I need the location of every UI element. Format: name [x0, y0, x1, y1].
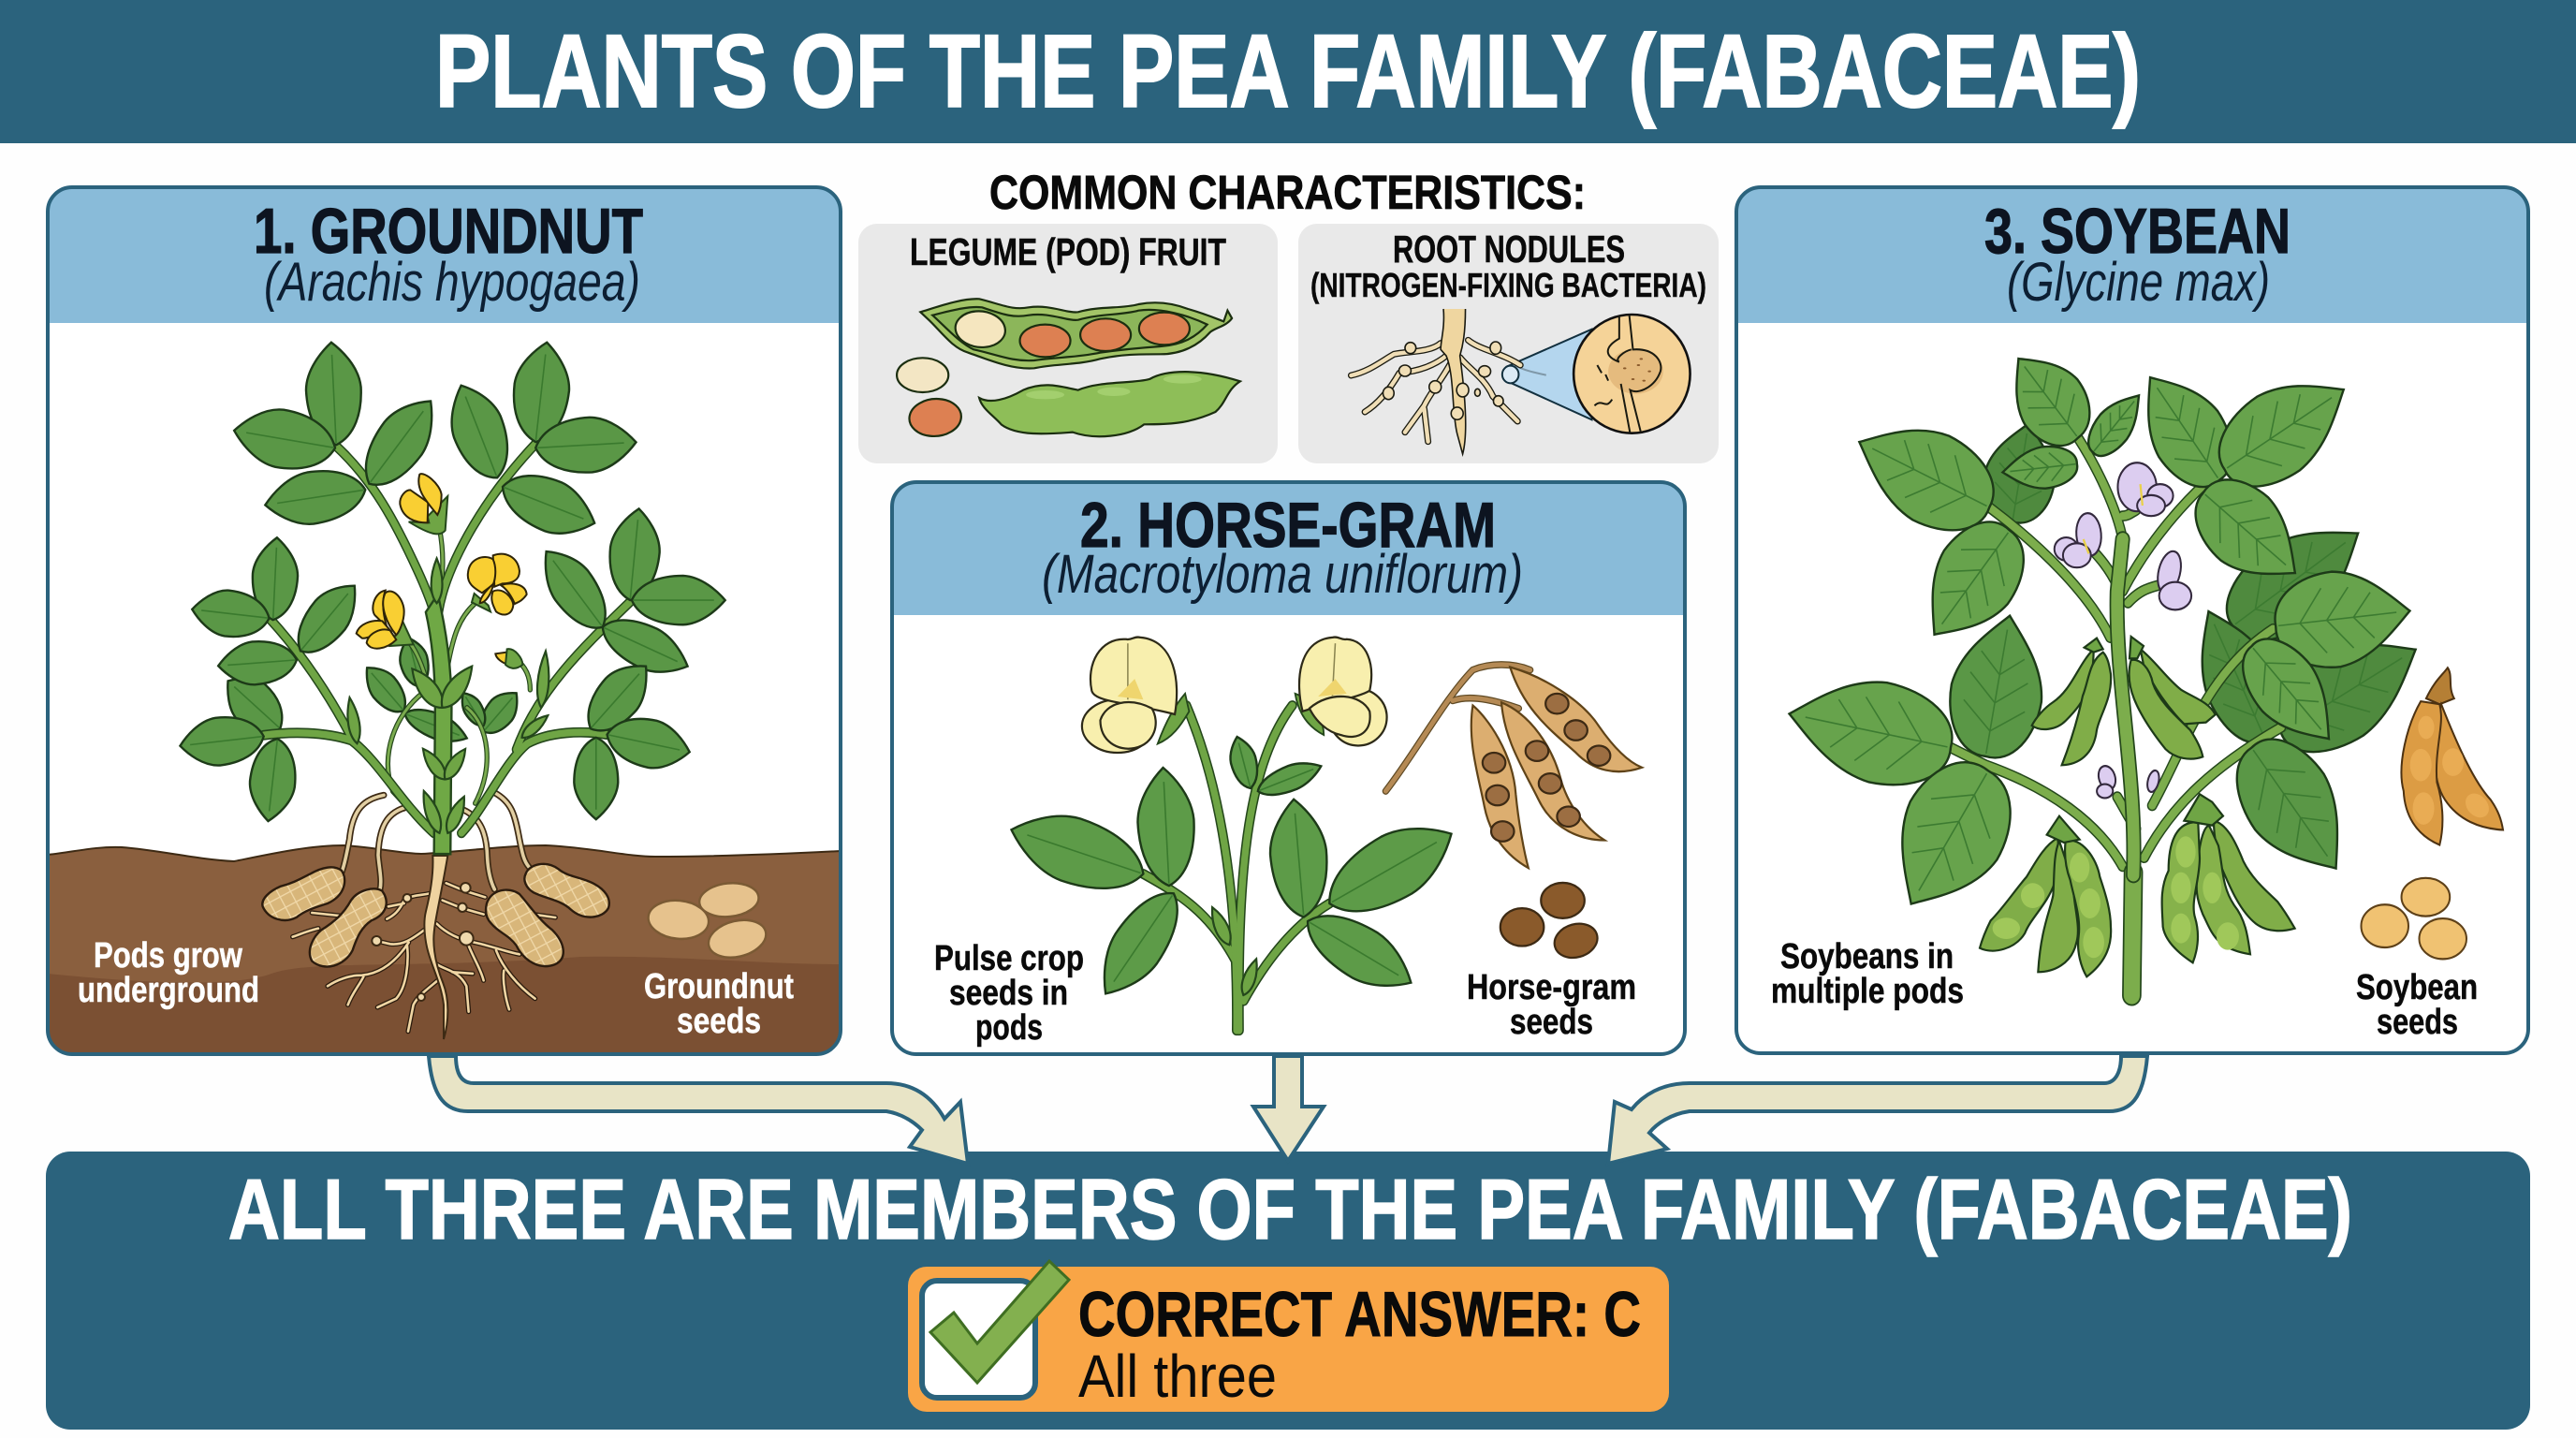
soybean flowers, ripe pods and seeds — [2055, 462, 2503, 959]
label: pods grow underground — [78, 936, 259, 1010]
title banner — [0, 0, 2576, 143]
arrow: soybean to conclusion — [1608, 1056, 2147, 1164]
label: horse-gram seeds: Horse-gram — [1467, 968, 1636, 1007]
soil — [48, 845, 841, 1054]
heading: legume pod fruit: LEGUME (POD) FRUIT — [910, 230, 1226, 273]
answer text: correct answer C: CORRECT ANSWER: C — [1078, 1279, 1641, 1350]
heading: common characteristics: COMMON CHARACTERISTICS: — [989, 166, 1586, 219]
label: soybean seeds: Soybean — [2356, 968, 2478, 1007]
soybean green pods — [1980, 637, 2295, 976]
heading: groundnut: 1. GROUNDNUT — [254, 196, 643, 267]
label: soybean seeds: seeds — [2377, 1003, 2458, 1042]
panel: root nodules — [1298, 224, 1719, 463]
label: horse-gram seeds — [1467, 968, 1636, 1042]
heading: soybean: 3. SOYBEAN — [1984, 196, 2291, 267]
soybean stems and leaves — [1780, 336, 2437, 995]
subheading: nitrogen-fixing bacteria: (NITROGEN-FIXING BACTERIA) — [1310, 266, 1706, 304]
heading: horse-gram: 2. HORSE-GRAM — [1080, 490, 1496, 561]
illustration: groundnut plant — [178, 339, 769, 1039]
panel header band: soybean — [1736, 187, 2528, 323]
panel: soybean — [1736, 187, 2528, 1053]
label: soybeans in multiple pods: Soybeans in — [1780, 937, 1954, 976]
arrow: horse-gram to conclusion — [1253, 1056, 1324, 1161]
title banner: PLANTS OF THE PEA FAMILY (FABACEAE) — [435, 14, 2141, 129]
panel: horse-gram — [892, 482, 1685, 1054]
label: soybeans in multiple pods: multiple pods — [1771, 972, 1964, 1011]
heading: root nodules: ROOT NODULES — [1393, 227, 1625, 271]
panel header band: horse-gram — [892, 482, 1685, 615]
label: soybeans in multiple pods — [1771, 937, 1964, 1011]
illustration: soybean plant — [1780, 336, 2503, 995]
label: pods grow underground: Pods grow — [94, 936, 242, 976]
groundnut stems and leaves — [178, 339, 769, 962]
label: pulse crop seeds in pods: pods — [975, 1008, 1043, 1048]
panel: groundnut — [48, 187, 841, 1054]
label: pulse crop seeds in pods: seeds in — [949, 974, 1068, 1013]
illustration: horse-gram plant — [1002, 637, 1642, 1031]
scientific name: Arachis hypogaea: (Arachis hypogaea) — [264, 252, 640, 313]
label: soybean seeds — [2356, 968, 2478, 1042]
label: pods grow underground: underground — [78, 971, 259, 1010]
answer text: all three: All three — [1078, 1343, 1277, 1410]
icon: root with magnified nodule — [1351, 309, 1690, 454]
label: groundnut seeds: Groundnut — [644, 967, 794, 1006]
panel: legume pod fruit — [858, 224, 1278, 463]
label: horse-gram seeds: seeds — [1510, 1003, 1593, 1042]
scientific name: Glycine max: (Glycine max) — [2007, 252, 2270, 313]
icon: legume pods and seeds — [897, 299, 1240, 438]
conclusion banner — [46, 1152, 2530, 1430]
scientific name: Macrotyloma uniflorum: (Macrotyloma uniflorum) — [1042, 544, 1523, 605]
arrow: groundnut to conclusion — [429, 1056, 968, 1164]
label: groundnut seeds: seeds — [677, 1002, 761, 1041]
panel header band: groundnut — [48, 187, 841, 323]
answer callout — [908, 1261, 1669, 1412]
label: pulse crop seeds in pods — [934, 939, 1084, 1048]
label: pulse crop seeds in pods: Pulse crop — [934, 939, 1084, 978]
groundnut flowers — [357, 474, 527, 668]
label: groundnut seeds — [644, 967, 794, 1041]
icon: check box — [922, 1261, 1069, 1398]
groundnut roots and pods — [262, 793, 609, 1039]
